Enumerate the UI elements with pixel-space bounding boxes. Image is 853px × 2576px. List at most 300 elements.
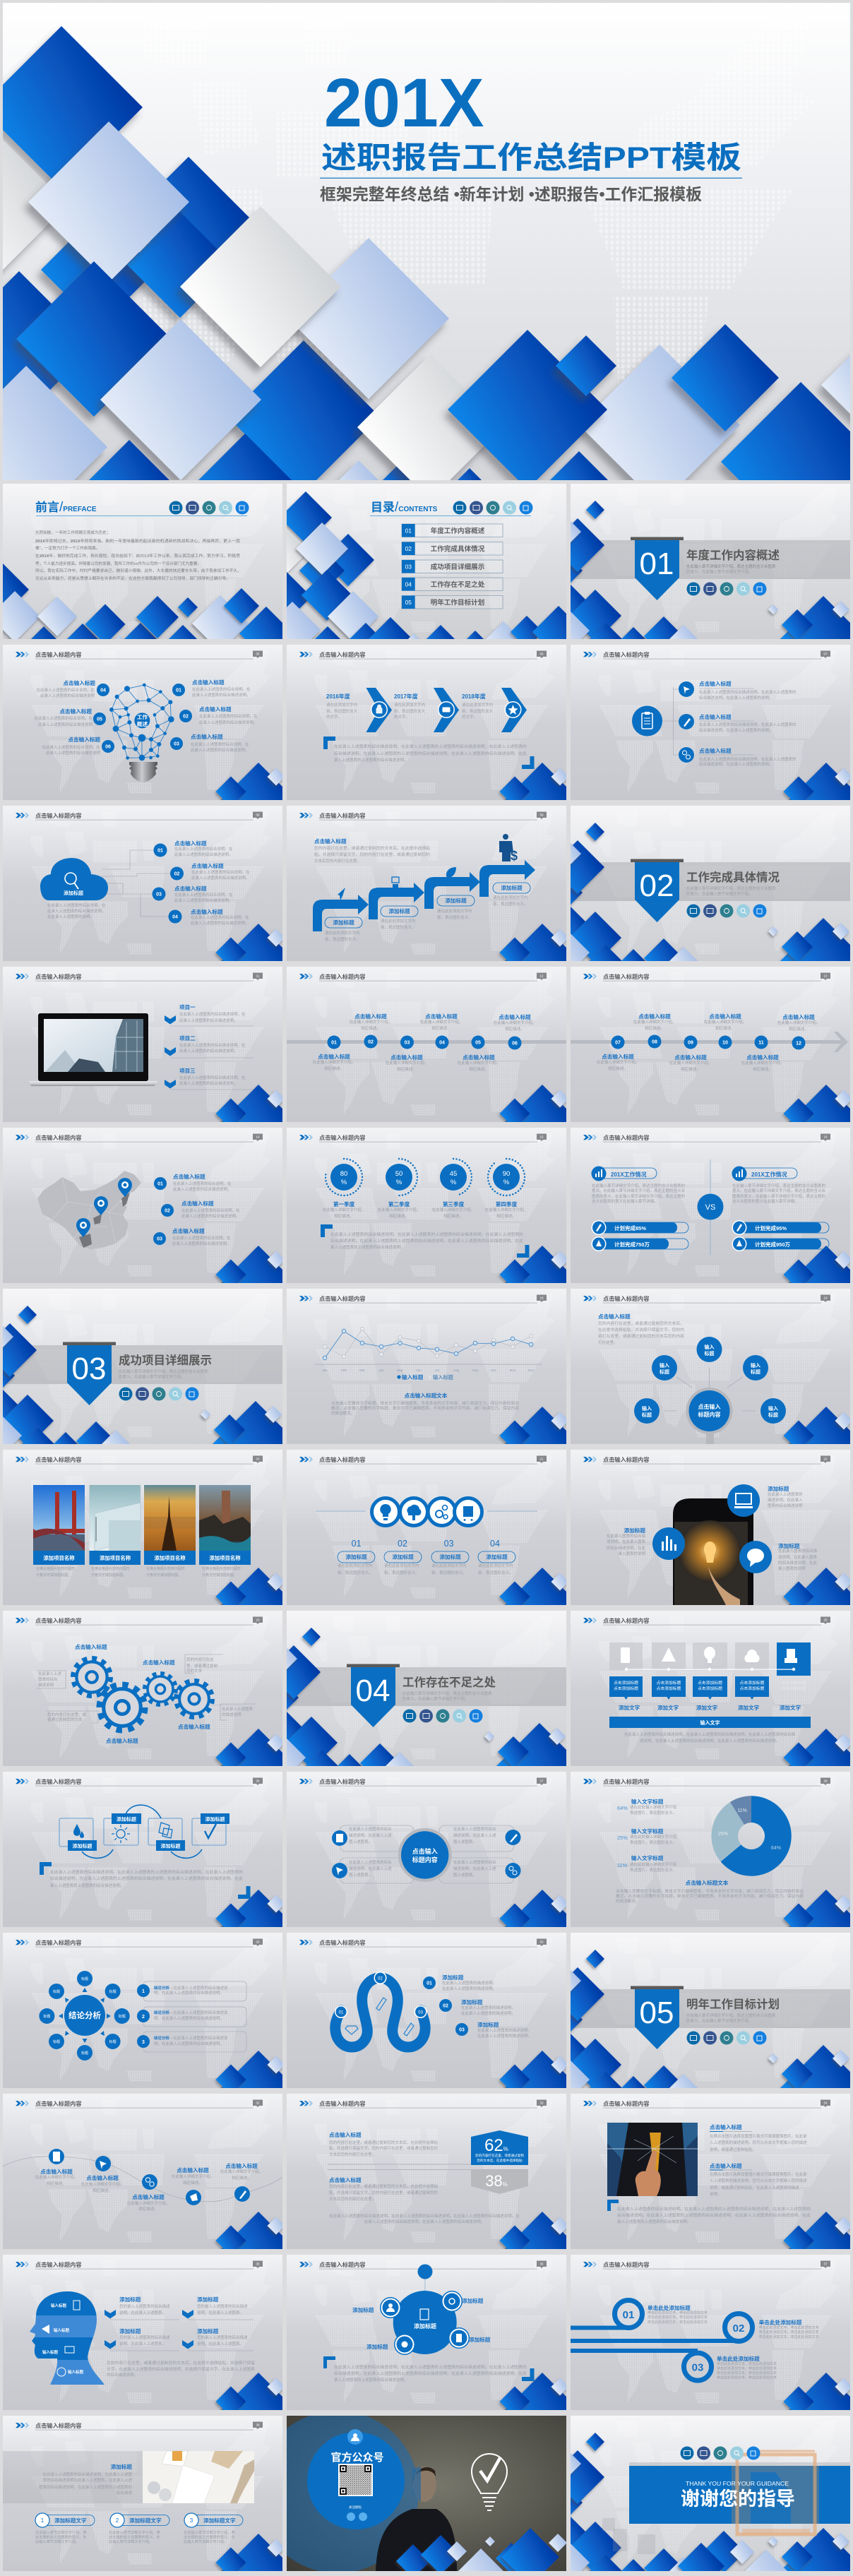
paragraph: 的综合描述说明。 xyxy=(107,2372,138,2378)
descriptions: 分格式可填加图标图。 xyxy=(91,1573,126,1578)
curve icons xyxy=(345,1998,414,2036)
header: 点击输入标题内容 xyxy=(319,1939,366,1946)
item 04: 在此录入上述图表的综合说明。在 xyxy=(191,914,249,920)
header: 09 xyxy=(539,813,544,816)
footer text: 在此录入上述图表的综合描述说明。在此录入上述图表的综合描述说明。在此录入上述图表的综合描述说明。在 xyxy=(329,2213,520,2219)
heading: 目录/CONTENTS xyxy=(371,500,438,515)
item 1 xyxy=(137,1981,246,2001)
label 05: 05 xyxy=(97,717,102,722)
header xyxy=(16,2100,263,2109)
header: 13 xyxy=(823,974,828,977)
header: 34 xyxy=(823,2101,828,2104)
header: 06 xyxy=(539,652,544,655)
diamonds xyxy=(547,2433,853,2576)
right bar 95 xyxy=(732,1220,829,1235)
label 01: 在此录入上述图表的综合说明。在 xyxy=(192,686,251,692)
item 02: 在此录入上述图表的描述说明。 xyxy=(461,2005,515,2010)
head silhouette xyxy=(24,2290,109,2385)
header: 05 xyxy=(256,652,260,655)
year 2017 xyxy=(394,688,459,732)
number: 05 xyxy=(640,1996,674,2030)
header: 27 xyxy=(539,1779,544,1782)
blue boxes xyxy=(609,1676,769,1700)
cloud: 添加标题 xyxy=(64,890,83,896)
diamonds xyxy=(0,1306,299,1487)
photo xyxy=(143,2451,254,2503)
background xyxy=(571,1289,850,1444)
item 02: 此录入上述图表的综合描述说明。 xyxy=(191,875,250,881)
label 1: 点击输入标题 xyxy=(40,2168,73,2175)
text upper: 贴，并选择只保留文字。您的内容打在这里，或者通过复制您的 xyxy=(329,2145,439,2151)
corner xyxy=(216,763,297,840)
item 03: 添加标题 xyxy=(477,2021,499,2028)
descriptions: 在横合格图片放到内图形 xyxy=(202,1566,241,1571)
background xyxy=(571,1611,850,1766)
label top: 图表的综合描述说明 xyxy=(768,1503,803,1508)
bottom labels: 相应描述。 xyxy=(753,1066,773,1072)
header: 点击输入标题内容 xyxy=(35,651,82,658)
tag: top second xyxy=(112,1813,141,1824)
ring icons xyxy=(380,1504,473,1521)
banner backing xyxy=(629,2462,850,2466)
slide: contents xyxy=(287,484,566,639)
item 02: 在此录入上述图表的综合说明。在 xyxy=(191,869,250,875)
corner xyxy=(500,1568,581,1645)
text 2: 点击输入标题 xyxy=(710,2162,742,2169)
satellites xyxy=(380,2291,470,2355)
descriptions: 达主题的含义合图表的意义。在 xyxy=(35,2534,87,2539)
satellite lower right: 输入 xyxy=(768,1405,778,1412)
header xyxy=(16,1456,263,1465)
paragraph: 录入上述图表的上述图表的综合描述说明。 xyxy=(50,1883,124,1888)
item 03: 在此录入上述图表的综合说明。在 xyxy=(174,892,233,898)
caption body xyxy=(331,1400,520,1416)
label left: 在此录入图表的综合描 xyxy=(607,1533,645,1539)
label 06: 在此录入上述图表的综合说明。在 xyxy=(42,744,100,750)
hero background with dotted world map xyxy=(3,3,850,480)
social icons xyxy=(347,2512,367,2521)
translucent blue circle xyxy=(256,2411,419,2573)
top labels: 点击输入标题 xyxy=(354,1013,387,1020)
slide: cloud xyxy=(3,806,297,1001)
item 2: 在此录入上述图表的综合描述说明。在 xyxy=(179,1042,246,1048)
slide: preface xyxy=(3,484,282,639)
header: 23 xyxy=(256,1618,260,1621)
header xyxy=(299,1295,547,1304)
step 1 xyxy=(325,917,362,942)
box text: 点击添加标题 xyxy=(740,1686,765,1691)
subtitle: 的意义。在此输入章节详细文字介绍。 xyxy=(686,569,753,575)
bottom labels: 点击输入标题 xyxy=(674,1054,707,1061)
label 05 xyxy=(34,708,106,727)
slide: S curve xyxy=(287,1933,581,2128)
slide: four icon rings xyxy=(287,1450,581,1645)
item 04: 04 xyxy=(405,580,412,588)
curve nodes: 02 xyxy=(378,1977,383,1981)
background xyxy=(287,1450,566,1605)
note left xyxy=(37,1671,66,1688)
quarter 2: 相应描述。 xyxy=(389,1213,409,1219)
item 02 xyxy=(402,542,503,555)
bracket xyxy=(607,2200,619,2211)
header: 点击输入标题内容 xyxy=(35,1456,82,1463)
label 2: 在此输入详细文字介绍， xyxy=(81,2181,124,2187)
label 03 xyxy=(170,733,249,753)
header xyxy=(16,651,263,660)
gear labels: 点击输入标题 xyxy=(106,1737,138,1744)
label 1: 在此输入详细文字介绍， xyxy=(35,2174,78,2180)
item 01: 在此录入上述图表的描述说明。 xyxy=(442,1986,496,1991)
header: 36 xyxy=(539,2262,544,2265)
item 02: 02 xyxy=(443,2004,448,2008)
item 02 xyxy=(170,862,250,881)
text 2: 在横点击图片选择设置图片格式可填满替换图片。在此录 xyxy=(710,2171,807,2177)
item 01: 点击输入标题 xyxy=(174,840,207,847)
quarter 1 xyxy=(323,1159,365,1219)
step 3: 容，表达图形含义。 xyxy=(437,914,472,920)
label 06 xyxy=(42,736,114,756)
descriptions: 在横合格图片放到内图形 xyxy=(36,1566,75,1571)
background xyxy=(287,1772,566,1927)
quarter 1: 相应描述。 xyxy=(334,1213,354,1219)
paragraph xyxy=(50,1869,244,1888)
background xyxy=(287,1128,566,1283)
descriptions: 容，表达图形含义。 xyxy=(384,1570,419,1575)
year 2017: 的文字。 xyxy=(394,714,410,720)
labels xyxy=(352,2297,491,2350)
header: 点击输入标题内容 xyxy=(35,973,82,980)
descriptions: 请在此处添加文字内 xyxy=(431,1563,467,1568)
faint blocks xyxy=(602,2518,655,2554)
text 1: 在横点击图片选择设置图片格式可填满替换图片。在此录 xyxy=(710,2133,807,2139)
item 3: 明。在此录入上述图表的综合描述说明。 xyxy=(154,2041,224,2046)
arcs xyxy=(82,1805,202,1858)
bottom labels: 点击输入标题 xyxy=(390,1054,423,1061)
hero rule xyxy=(320,178,742,179)
step 1: 请在此处添加文字内 xyxy=(325,930,360,936)
subtitle: 的意义。在此输入章节详细文字介绍。 xyxy=(686,2018,753,2024)
bulb network xyxy=(109,684,174,761)
month labels: Apr xyxy=(378,1368,384,1372)
texts left xyxy=(349,1826,392,1878)
arrow 3 xyxy=(424,872,480,909)
item 01 xyxy=(423,1974,496,1991)
diamonds xyxy=(547,1950,853,2131)
right text: 在此输入章节详细文字介绍。表达主题的含义合图表的 xyxy=(732,1183,826,1188)
pill 3: 3 xyxy=(190,2517,193,2524)
quarter 3: 45 xyxy=(450,1170,457,1178)
item 02: 02 xyxy=(174,871,179,877)
descriptions: 在此输入章节详细文字介绍。表 xyxy=(109,2529,160,2535)
bracket xyxy=(517,1245,530,1258)
paragraph xyxy=(107,2360,256,2378)
photo: eiffel sunset xyxy=(144,1485,196,1551)
curve xyxy=(335,1978,425,2047)
slide: quarter circles xyxy=(287,1128,581,1323)
top labels: 在此输入详细文字介绍。 xyxy=(420,1019,463,1025)
header: 37 xyxy=(823,2262,828,2265)
label 3 xyxy=(127,2193,169,2212)
watermark stamp xyxy=(732,2451,819,2534)
labels: 添加文字 xyxy=(696,1704,718,1711)
header: 点击输入标题内容 xyxy=(603,2261,650,2268)
pin 1 xyxy=(118,1178,132,1197)
item 2: 02 xyxy=(165,1209,170,1213)
arrow 1 xyxy=(313,895,369,931)
header xyxy=(16,973,263,982)
legend 1: 请在此处输入详细文字介绍 xyxy=(630,1804,677,1810)
header: 21 xyxy=(539,1457,544,1460)
label 1: 相应描述。 xyxy=(47,2181,66,2186)
descriptions: 请在此处添加文字内 xyxy=(338,1563,373,1568)
VS badge: VS xyxy=(705,1203,715,1212)
corner xyxy=(216,2373,297,2450)
descriptions: 在此输入章节详细文字介绍。表 xyxy=(35,2529,87,2535)
corner xyxy=(500,1246,581,1323)
nodes: 07 xyxy=(615,1041,621,1045)
label top: 在此录入上述图表的 xyxy=(768,1491,803,1497)
paragraph xyxy=(334,744,527,763)
band xyxy=(3,1345,282,1384)
label 05: 点击输入标题 xyxy=(59,708,92,715)
legend 2 xyxy=(617,1827,677,1845)
icon circle xyxy=(347,2429,363,2445)
bracket xyxy=(522,756,534,769)
badge 62: 62% xyxy=(484,2136,508,2155)
background xyxy=(287,967,566,1122)
descriptions: 此输入章节详细文字介绍。 xyxy=(109,2539,153,2544)
intro: 点击输入标题 xyxy=(598,1313,631,1320)
header: 点击输入标题内容 xyxy=(35,1134,82,1141)
label 05: 在此录入上述图表的综合说明。在 xyxy=(34,715,93,721)
band xyxy=(3,2451,143,2503)
satellite labels: 标题 xyxy=(53,1989,60,1994)
circle: speech xyxy=(739,1541,772,1573)
background xyxy=(287,2255,566,2410)
descriptions: 分格式可填加图标图。 xyxy=(202,1573,237,1578)
header xyxy=(583,1295,830,1304)
caption body: 的简洁概况。 xyxy=(331,1410,354,1416)
text lower: 贴，并选择只保留文字。您的内容打在这里，或者通过复制您的 xyxy=(329,2190,439,2195)
captions: 添加项目名称 xyxy=(100,1555,131,1561)
legend 3: 表述图片，表达图形含义。 xyxy=(630,1867,676,1873)
nodes: 01 xyxy=(331,1041,337,1045)
quarter 3: 相应描述。 xyxy=(443,1213,463,1219)
paragraph: 在此录入上述图表的综合描述说明。在此录入上述图表的上述图表的综合描述说明。在此录入上述图表的 xyxy=(330,1232,524,1237)
paragraph: 录入上述图表的上述图表的综合描述说明。 xyxy=(334,757,408,763)
right text: 图表的意义。在此输入章节详细文字介绍。表达主题的 xyxy=(732,1193,826,1199)
text lower: 文本后您的内容打在这里。 xyxy=(329,2196,376,2202)
background xyxy=(287,2094,566,2249)
diamonds xyxy=(547,501,853,682)
background xyxy=(287,484,566,639)
slide: three items list xyxy=(571,645,853,840)
top labels xyxy=(350,1013,536,1032)
pill 1: 1 xyxy=(41,2517,44,2524)
corner xyxy=(216,1890,297,1967)
gear labels: 点击输入标题 xyxy=(143,1659,175,1666)
number: 02 xyxy=(640,869,674,903)
satellite labels xyxy=(43,1976,126,2056)
paragraph: 综合描述说明。在此录入上述图表的上述图表的综合描述说明。在此录入上述图表的综合描述说明。在此 xyxy=(617,2212,811,2218)
subtitle xyxy=(686,564,776,575)
subtitle: 的意义。在此输入章节详细文字介绍。 xyxy=(686,891,753,897)
slide: photos xyxy=(3,1450,297,1645)
texts left: 描述说明。在此录入上述 xyxy=(349,1866,392,1871)
item c: 说明。在此录入上述图表。 xyxy=(119,2341,166,2347)
nodes: 06 xyxy=(512,1041,518,1046)
header: 07 xyxy=(823,652,828,655)
quarter 1: % xyxy=(341,1179,347,1186)
descriptions: 此输入章节详细文字介绍。 xyxy=(184,2539,227,2544)
slide: conclusion analysis xyxy=(3,1933,297,2128)
label 03: 点击输入标题 xyxy=(191,733,223,740)
item 1 xyxy=(679,680,797,700)
icon: plane xyxy=(338,888,345,900)
quarter 2: 第二季度 xyxy=(388,1200,410,1208)
pills: 添加标题 xyxy=(392,1554,414,1561)
gear 3 xyxy=(145,1674,176,1705)
item 02: 在此录入上述图表的描述说明。 xyxy=(461,2010,515,2016)
background xyxy=(571,806,850,961)
year 2017: 请在此添加文字内 xyxy=(394,702,425,708)
item 03 xyxy=(455,2021,532,2039)
tag: top fourth xyxy=(201,1813,229,1824)
bar: 输入文字 xyxy=(700,1719,720,1726)
item 04: 此录入上述图表的综合描述说明。 xyxy=(191,920,249,926)
slide: product photo xyxy=(3,2416,297,2576)
paragraph: 录入上述图表的上述图表的综合描述说明。 xyxy=(334,2377,408,2383)
quarter 4 xyxy=(485,1159,527,1219)
header: 14 xyxy=(256,1135,260,1138)
month labels: Nov xyxy=(510,1368,516,1372)
slide: big circle xyxy=(287,2255,581,2450)
label 04: 在此录入上述图表的综合说明。在 xyxy=(36,687,95,693)
label right: 录入图表的说明 xyxy=(778,1566,806,1571)
slide: year chevrons xyxy=(287,645,581,840)
text 2: 单击此处添加文本，单击此处添加文本 xyxy=(759,2325,819,2330)
intro: 您的内容打在这里，或者通过复制您的文本后，在此框中选择粘 xyxy=(314,845,431,851)
item b: 添加标题 xyxy=(197,2296,219,2303)
quarter 4: 相应描述。 xyxy=(496,1213,516,1219)
left bar 750: 计划完成750万 xyxy=(614,1241,650,1248)
item 3: 在此录入上述图表的综合描述说明。在 xyxy=(179,1075,246,1080)
paragraph: 综合描述说明。在此录入上述图表的上述图表的综合描述说明。在此录入上述图表的综合描述说明。在此 xyxy=(334,751,527,756)
month labels xyxy=(322,1368,535,1372)
item d: 添加标题 xyxy=(197,2327,219,2334)
slide: process boxes xyxy=(3,1772,297,1967)
corner xyxy=(216,1729,297,1806)
ribbon xyxy=(631,859,767,922)
item c: 您的录入上述图表的综合描述 xyxy=(119,2334,170,2340)
label 2 xyxy=(81,2174,124,2193)
right text: 意义。在此输入章节详细文字介绍。表达主题的含义合 xyxy=(732,1188,826,1193)
right bar 95: 计划完成95% xyxy=(755,1224,787,1232)
timeline band with arrow xyxy=(571,1032,848,1052)
month labels: Feb xyxy=(341,1368,347,1372)
label 4: 相应描述。 xyxy=(183,2180,203,2186)
label 04: 04 xyxy=(100,688,106,693)
cloud caption: 在此录入上述图表的综合说明。在 xyxy=(47,902,106,908)
texts right: 图上述图表。 xyxy=(453,1872,477,1878)
node icons xyxy=(53,2152,246,2201)
nodes: 09 xyxy=(688,1041,693,1045)
year 2018: 请在此添加文字内 xyxy=(462,702,493,708)
ring 03: 03 xyxy=(692,2362,703,2374)
pill 3: 添加标题文字 xyxy=(203,2517,236,2524)
item 03 xyxy=(153,885,233,903)
connectors xyxy=(102,850,170,917)
text 1: 说明，或者通过复制粘贴。 xyxy=(710,2147,756,2152)
satellite top: 输入 xyxy=(705,1344,715,1350)
descriptions: 达主题的含义合图表的意义。在 xyxy=(109,2534,160,2539)
text 3: 单击此处添加标题 xyxy=(717,2355,760,2362)
laptop xyxy=(29,1013,157,1086)
corner xyxy=(784,1407,853,1484)
item 2: 2 xyxy=(142,2015,145,2020)
item 3: 3 xyxy=(142,2040,145,2045)
pills xyxy=(338,1551,515,1563)
label 01: 此录入上述图表的综合描述说明。 xyxy=(192,692,251,698)
item 2 xyxy=(165,1035,253,1058)
note left: 描述说明 xyxy=(38,1682,54,1688)
texts left: 图上述图表。 xyxy=(349,1872,372,1878)
gear 1 xyxy=(73,1659,110,1695)
labels: 添加文字 xyxy=(780,1704,801,1711)
text lower xyxy=(329,2176,439,2202)
item 03: 此录入上述图表的综合描述说明。 xyxy=(174,898,233,903)
heading: 添加标题 xyxy=(111,2463,132,2470)
label 02: 此录入上述图表的综合描述说明。 xyxy=(199,720,258,725)
slide: official account xyxy=(256,2411,567,2576)
center oval: 点击输入 xyxy=(412,1847,438,1855)
nodes xyxy=(332,1830,521,1878)
top labels: 相应描述。 xyxy=(361,1025,381,1031)
header: 点击输入标题内容 xyxy=(35,1939,82,1946)
note top right: 您的内容打在这 xyxy=(186,1657,214,1662)
satellite labels: 标题 xyxy=(81,2051,88,2056)
item 3: 结论分析—在此录入上述图表的综合描述说 xyxy=(154,2035,228,2041)
header: 点击输入标题内容 xyxy=(603,1778,650,1785)
header xyxy=(583,1778,830,1787)
left title pill: 201X工作情况 xyxy=(611,1171,647,1178)
corner xyxy=(784,1085,853,1162)
legend 3: 请在此处输入详细文字介绍 xyxy=(630,1861,677,1867)
item 3: 在此录入上述图表的综合说明。在 xyxy=(172,1235,231,1241)
background xyxy=(3,1933,282,2088)
box text: 点击添加标题 xyxy=(614,1686,638,1691)
right bar 950 xyxy=(732,1236,829,1251)
band xyxy=(571,862,850,901)
satellite labels: 标题 xyxy=(109,2039,117,2044)
bottom labels: 在此输入详细文字介绍。 xyxy=(741,1060,784,1066)
header: 点击输入标题内容 xyxy=(603,1617,650,1624)
title: 官方公众号 xyxy=(330,2451,384,2464)
right text: 含义合图表的意义在此输入章节详细。 xyxy=(732,1198,799,1204)
item 02: 点击输入标题 xyxy=(191,862,224,869)
item b: 您的录入上述图表的综合描述 xyxy=(197,2303,248,2309)
item 01: 在此录入上述图表的综合说明。在 xyxy=(174,846,233,852)
badge 62: 您的内容打在这里，或者通过复制 xyxy=(475,2153,524,2158)
title: 工作完成具体情况 xyxy=(686,870,780,884)
timeline band xyxy=(287,1040,566,1044)
arrows xyxy=(664,1368,756,1411)
head labels: 输入标题 xyxy=(42,2349,59,2355)
gear labels: 点击输入标题 xyxy=(178,1723,210,1730)
texts right: 在此录入上述图表的综合 xyxy=(453,1859,496,1865)
month labels: Dec xyxy=(528,1368,535,1372)
label 03: 在此录入上述图表的综合说明。在 xyxy=(191,741,249,747)
